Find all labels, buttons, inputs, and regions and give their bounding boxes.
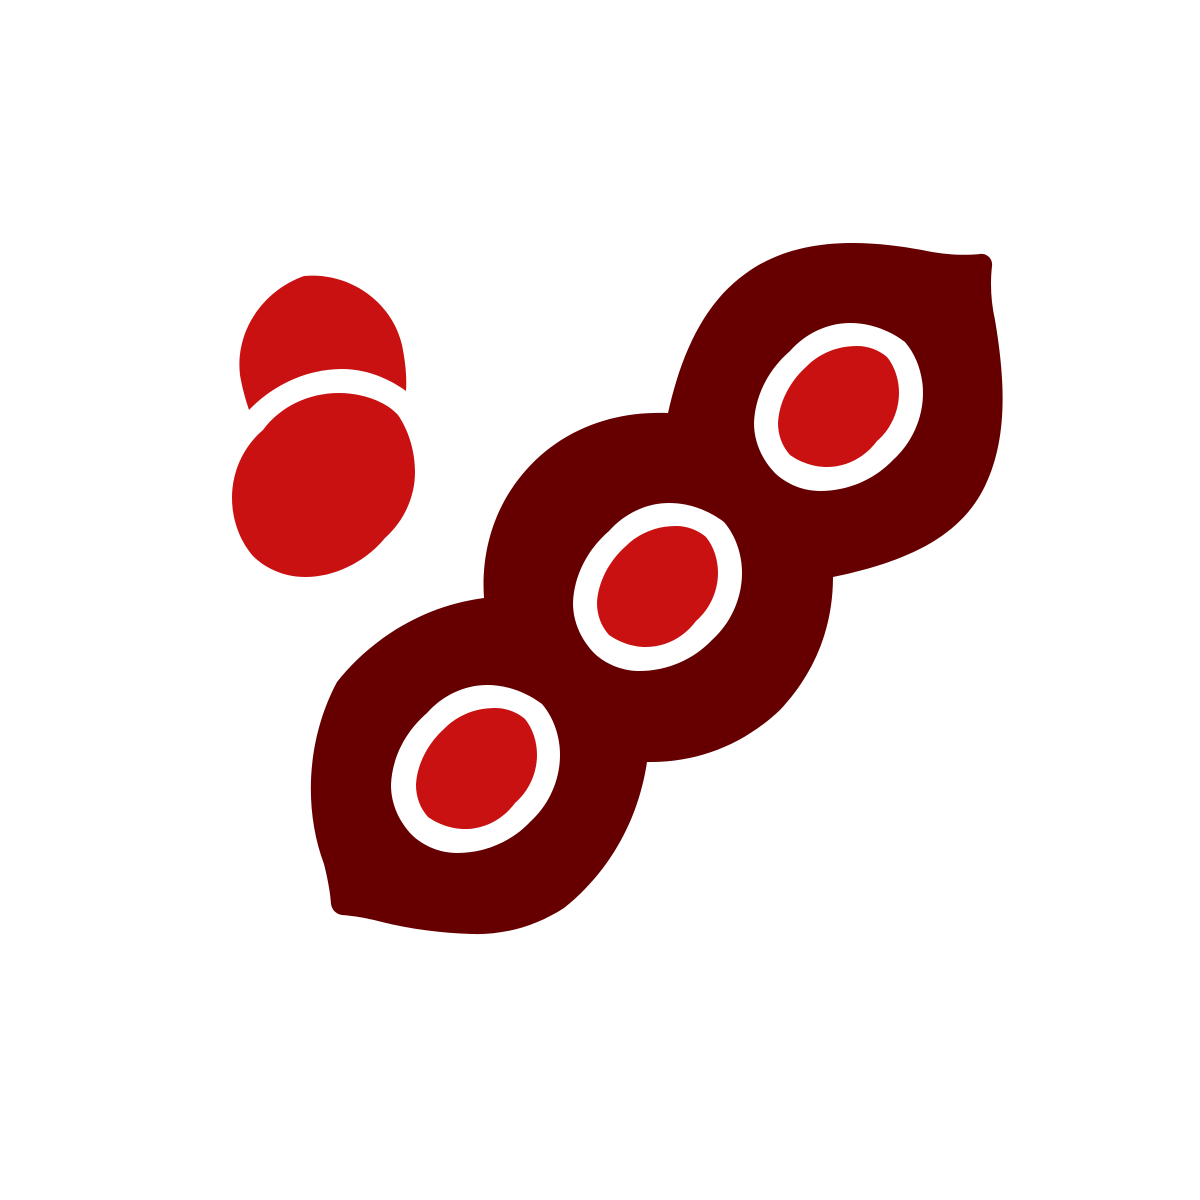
seed 1 ring	[391, 685, 560, 853]
seed 2 ring	[573, 503, 742, 671]
seed 1	[416, 708, 537, 829]
seed 3 ring	[754, 323, 923, 491]
loose bean front	[232, 393, 415, 577]
loose bean back	[239, 276, 406, 410]
seed 2	[597, 526, 718, 647]
seed 3	[778, 346, 899, 467]
pod body	[311, 243, 1003, 934]
